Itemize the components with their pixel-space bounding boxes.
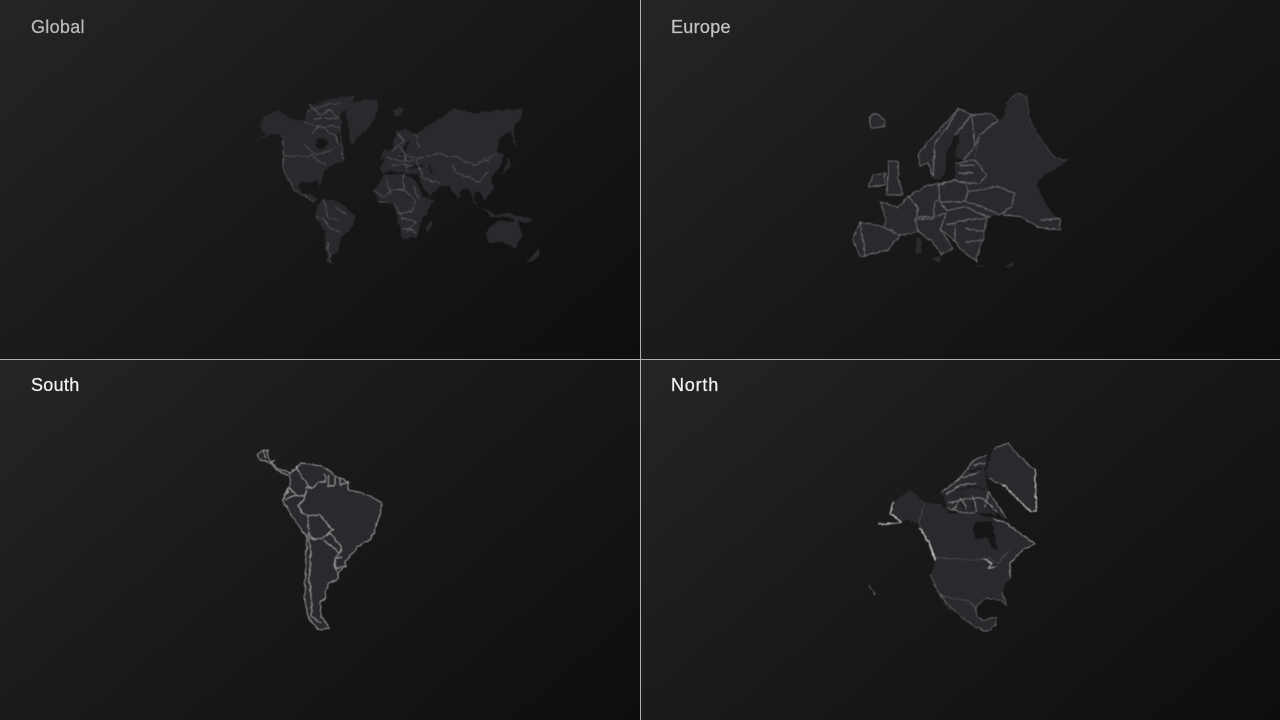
panel: global: [0, 0, 640, 360]
landmass: central america: [257, 449, 290, 475]
europe borders and coastlines: [853, 92, 1068, 262]
landmass: hawaii: [868, 585, 875, 595]
faint label: finance: Finance: [671, 682, 721, 698]
landmass: mainland europe and russia: [853, 92, 1068, 262]
panel: europe: [640, 0, 1280, 360]
landmass: sicily: [931, 257, 942, 263]
landmass: ireland: [868, 173, 885, 187]
landmass: uk: [381, 150, 388, 160]
landmass: iceland: [393, 108, 402, 118]
north america map: [868, 443, 1037, 632]
faint label: finance: Finance: [671, 322, 721, 338]
landmass: africa: [373, 173, 435, 240]
faint label: finance: Finance: [31, 322, 81, 338]
heading: south: South: [31, 375, 80, 395]
landmass: greenland: [986, 443, 1037, 512]
caspian sea: [428, 164, 433, 173]
landmass: japan: [500, 157, 510, 176]
landmass: south america: [282, 463, 383, 630]
hudson bay: [316, 138, 328, 149]
landmass: cyprus: [1004, 261, 1013, 268]
landmass: great britain: [887, 160, 903, 195]
landmass: greenland: [346, 100, 379, 145]
landmass: scandinavia: [918, 108, 998, 180]
heading: north: North: [671, 375, 719, 395]
landmass: eurasia: [380, 108, 523, 213]
south america borders and coastlines: [257, 449, 383, 630]
black sea: [408, 165, 423, 168]
landmass: sardinia: [916, 237, 922, 253]
arctic sea channels: [955, 468, 1000, 517]
europe map: [853, 92, 1068, 268]
landmass: new zealand: [527, 248, 540, 262]
south america map: [257, 449, 383, 630]
landmass: north america mainland: [878, 490, 1035, 632]
bright coastlines: [878, 443, 1037, 632]
landmass: madagascar: [425, 220, 432, 232]
landmass: iceland: [868, 113, 885, 128]
landmass: australia: [487, 218, 523, 248]
heading: europe: Europe: [671, 17, 731, 37]
hudson bay: [973, 522, 997, 550]
world map: [252, 97, 540, 267]
landmass: crete: [972, 264, 986, 267]
landmass: south america: [315, 198, 357, 267]
landmass: arctic islands: [942, 455, 1007, 518]
baltic sea: [399, 142, 409, 157]
faint label: finance: Finance: [31, 682, 81, 698]
landmass: north america: [252, 97, 355, 203]
heading: global: Global: [31, 17, 85, 37]
panel: north: [640, 360, 1280, 720]
world coastlines and borders: [282, 103, 497, 262]
panel: south: [0, 360, 640, 720]
horizontal divider: [0, 359, 1280, 360]
landmass: indonesia: [482, 207, 533, 222]
vertical divider: [640, 0, 641, 720]
